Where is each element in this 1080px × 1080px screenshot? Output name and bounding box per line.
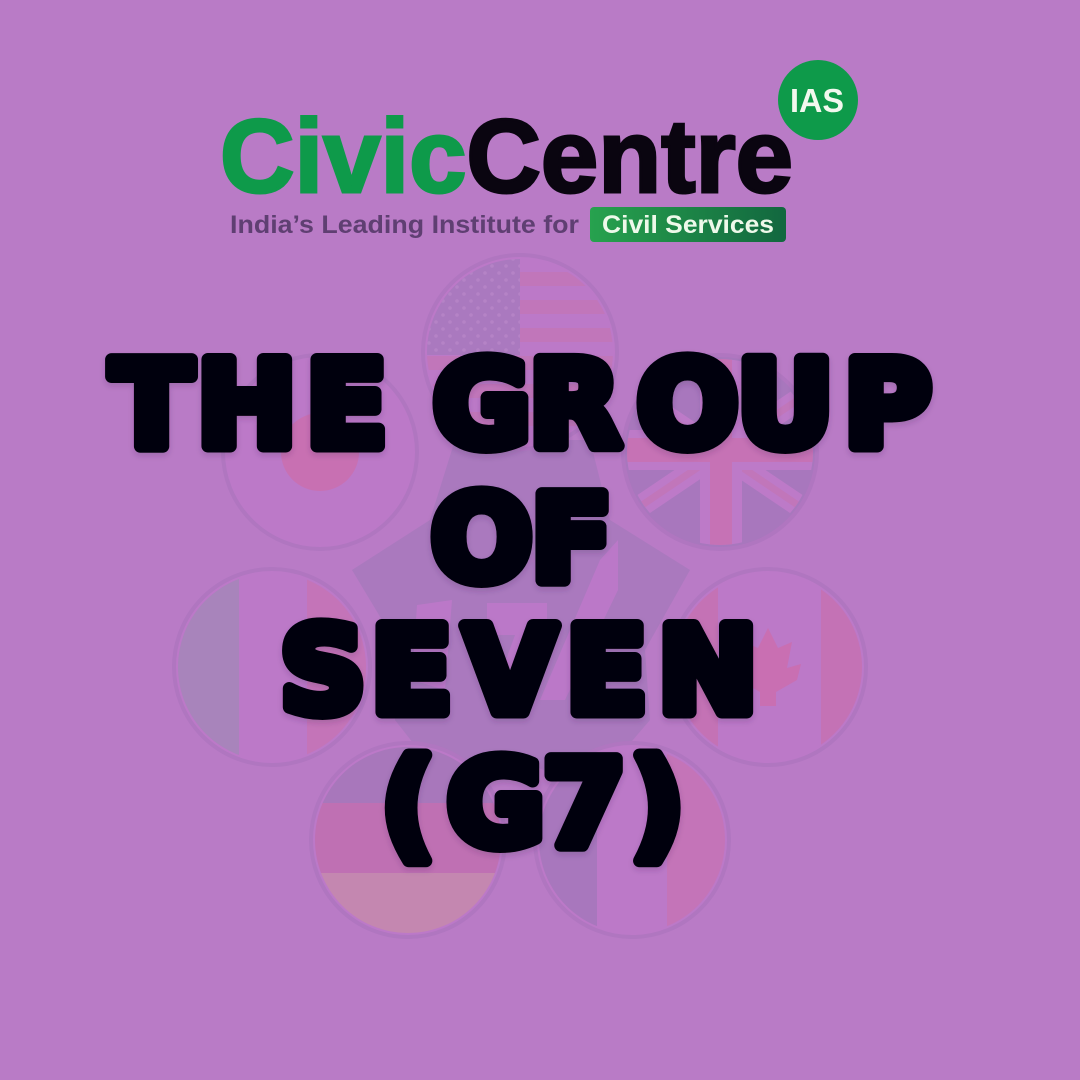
- title line 2: OF: [431, 471, 612, 609]
- logo: [220, 60, 858, 242]
- title: [111, 337, 931, 874]
- flag: France: [535, 743, 733, 940]
- flag: United States: [423, 255, 620, 449]
- IAS badge: IAS: [790, 82, 844, 119]
- civil services badge: Civil Services: [602, 211, 774, 239]
- logo wordmark: CivicCentre: [220, 99, 793, 215]
- civil services badge: [590, 207, 786, 242]
- flag: United Kingdom: [620, 350, 820, 550]
- flag: Italy: [174, 569, 371, 765]
- flag: Germany: [310, 743, 510, 943]
- title line 4: (G7): [381, 736, 684, 874]
- flag: Canada: [670, 569, 871, 765]
- title line 1: THE GROUP: [111, 337, 931, 475]
- tagline: India’s Leading Institute for: [230, 211, 579, 239]
- IAS badge: [778, 60, 858, 140]
- title line 3: SEVEN: [280, 603, 758, 741]
- center emblem: [352, 440, 690, 790]
- flag: Japan: [223, 355, 417, 549]
